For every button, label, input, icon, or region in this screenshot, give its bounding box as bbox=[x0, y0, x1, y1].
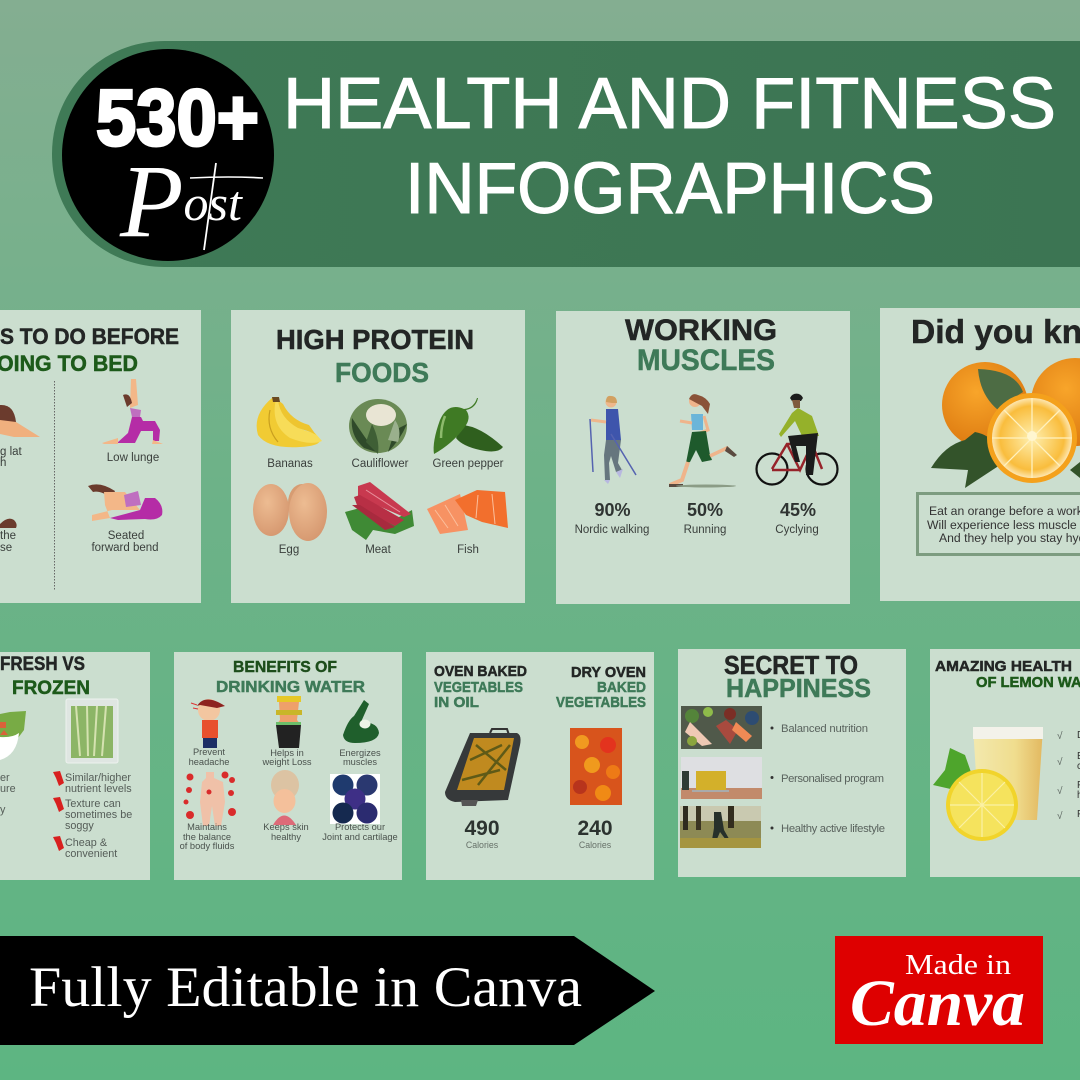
image: balanced food bbox=[681, 706, 762, 749]
heading: BENEFITS OF bbox=[233, 659, 337, 676]
heading bbox=[935, 658, 1080, 691]
text: percentages: 45% bbox=[780, 500, 816, 520]
text: frozen list: ure bbox=[0, 783, 16, 795]
text: checklist bbox=[1057, 730, 1080, 822]
text: left labels: se bbox=[0, 542, 12, 554]
icon: bananas bbox=[257, 397, 322, 447]
text: seated forward bend: forward bend bbox=[91, 542, 159, 554]
icon: stretch pose left bbox=[0, 405, 40, 528]
badge: 530+ Post bbox=[62, 49, 274, 261]
text: calories: 240 bbox=[577, 817, 613, 840]
text: frozen list: nutrient levels bbox=[65, 783, 132, 795]
text: happiness list: Healthy active lifestyle bbox=[781, 823, 885, 835]
icon: body fluids bbox=[184, 772, 236, 826]
icon: fish bbox=[427, 490, 508, 534]
heading bbox=[0, 324, 179, 376]
text: checklist: √ bbox=[1057, 810, 1063, 822]
text: checklist: √ bbox=[1057, 785, 1063, 797]
text: benefit labels: healthy bbox=[271, 832, 301, 842]
text: seated forward bend bbox=[91, 530, 159, 554]
icon: muscle arm bbox=[343, 700, 379, 743]
icon: baking tray bbox=[445, 729, 521, 806]
icon: runner bbox=[669, 394, 737, 488]
text: benefit labels: the balance bbox=[183, 832, 231, 842]
text: benefit labels: Keeps skin bbox=[263, 822, 309, 832]
panel: fresh vs frozen bbox=[0, 652, 150, 880]
text: frozen list: convenient bbox=[65, 848, 117, 860]
heading left: OVEN BAKED bbox=[434, 663, 527, 680]
heading right: DRY OVEN bbox=[571, 664, 646, 681]
text: benefit labels: of body fluids bbox=[180, 841, 235, 851]
panel: high protein foods bbox=[231, 310, 525, 603]
text: seated forward bend: Seated bbox=[108, 530, 144, 542]
text: frozen list: y bbox=[0, 804, 6, 816]
title: INFOGRAPHICS bbox=[405, 149, 935, 229]
icon: lemon water glass bbox=[933, 727, 1043, 841]
text: benefit labels: Energizes bbox=[339, 748, 381, 758]
heading right: VEGETABLES bbox=[556, 694, 646, 711]
text: food labels: Green pepper bbox=[433, 458, 504, 470]
badge: 530+ Post: ost bbox=[184, 175, 243, 231]
text: left labels: the bbox=[0, 530, 16, 542]
text: food labels: Fish bbox=[457, 544, 479, 556]
heading bbox=[276, 324, 474, 388]
heading: DRINKING WATER bbox=[216, 679, 365, 696]
icon: eggs bbox=[253, 483, 327, 541]
title bbox=[283, 64, 1056, 229]
image: active lifestyle bbox=[680, 806, 761, 848]
text: benefit labels: Maintains bbox=[187, 822, 227, 832]
arrow banner: fully editable: Fully Editable in Canva bbox=[29, 956, 582, 1019]
text: frozen list: Similar/higher bbox=[65, 772, 131, 784]
panel: lemon water bbox=[930, 649, 1080, 877]
icon: joints bbox=[330, 774, 380, 824]
badge: made in canva: Canva bbox=[850, 967, 1025, 1040]
text: activity labels: Nordic walking bbox=[575, 524, 649, 536]
text: percentages: 50% bbox=[687, 500, 723, 520]
panel: oven baked vegetables bbox=[426, 652, 654, 880]
heading: S TO DO BEFORE bbox=[0, 324, 179, 349]
text: percentages: 90% bbox=[594, 500, 631, 520]
arrow banner: fully editable bbox=[0, 936, 655, 1045]
text: low lunge: Low lunge bbox=[107, 452, 159, 464]
heading: FRESH VS bbox=[0, 653, 85, 675]
icon: nordic walker bbox=[590, 396, 636, 484]
text: benefit labels: weight Loss bbox=[261, 757, 312, 767]
heading bbox=[216, 659, 365, 696]
title: HEALTH AND FITNESS bbox=[283, 64, 1056, 144]
icon: seated forward bend bbox=[88, 484, 162, 521]
text: activity labels: Cyclying bbox=[775, 524, 819, 536]
panel: did you know bbox=[880, 308, 1080, 601]
text: percentages bbox=[594, 500, 816, 520]
text: benefit labels: headache bbox=[189, 757, 229, 767]
icon: red pins bbox=[53, 771, 64, 851]
panel: working muscles bbox=[556, 311, 850, 604]
text: left labels: g lat bbox=[0, 446, 23, 458]
header banner bbox=[52, 41, 1080, 267]
text: benefit labels: Joint and cartilage bbox=[322, 832, 398, 842]
panel: benefits of drinking water bbox=[174, 652, 402, 880]
heading right bbox=[556, 664, 646, 711]
icon: green pepper bbox=[434, 398, 503, 454]
heading: FOODS bbox=[335, 357, 429, 388]
text: checklist: √ bbox=[1057, 730, 1063, 742]
callout bbox=[918, 494, 1080, 554]
text: left labels bbox=[0, 446, 23, 554]
icon: boy with headache bbox=[191, 699, 225, 748]
text: frozen list: sometimes be bbox=[65, 809, 132, 821]
icon: towel face bbox=[271, 770, 299, 825]
text: food labels: Cauliflower bbox=[352, 458, 409, 470]
image: laptop bbox=[681, 757, 762, 799]
text: calories bbox=[464, 817, 613, 850]
text: benefit labels bbox=[180, 747, 398, 851]
text: food labels: Egg bbox=[279, 544, 299, 556]
panel: secret to happiness bbox=[678, 649, 906, 877]
text: frozen list: er bbox=[0, 772, 10, 784]
image: dry vegetables bbox=[570, 728, 622, 805]
heading bbox=[0, 653, 90, 699]
heading: HAPPINESS bbox=[726, 675, 871, 703]
text: benefit labels: Protects our bbox=[335, 822, 385, 832]
text: left labels: h bbox=[0, 457, 6, 469]
text: calories: Calories bbox=[579, 840, 612, 850]
panel: stretches before bed bbox=[0, 310, 201, 603]
badge: made in canva: Made in bbox=[905, 949, 1012, 981]
heading left bbox=[434, 663, 527, 711]
heading left: IN OIL bbox=[434, 694, 479, 711]
text: benefit labels: muscles bbox=[343, 757, 377, 767]
badge: 530+ Post: P bbox=[119, 144, 184, 259]
heading: MUSCLES bbox=[637, 344, 775, 377]
badge: made in canva bbox=[835, 936, 1043, 1044]
text: benefit labels: Helps in bbox=[270, 748, 304, 758]
icon: cyclist bbox=[756, 394, 838, 484]
text: checklist: √ bbox=[1057, 756, 1063, 768]
text: activity labels: Running bbox=[684, 524, 726, 536]
heading: HIGH PROTEIN bbox=[276, 324, 474, 355]
text: food labels bbox=[267, 458, 504, 556]
heading: WORKING bbox=[625, 314, 777, 347]
heading left: VEGETABLES bbox=[434, 679, 523, 696]
text: frozen list: Texture can bbox=[65, 798, 121, 810]
text: happiness list: Personalised program bbox=[781, 773, 884, 785]
text: activity labels bbox=[575, 524, 819, 536]
icon: salad bowl bbox=[0, 711, 26, 760]
icon: waist measure bbox=[276, 696, 302, 748]
text: frozen list: Cheap & bbox=[65, 837, 108, 849]
text: food labels: Meat bbox=[365, 544, 392, 556]
heading bbox=[724, 652, 871, 703]
icon: low lunge bbox=[102, 379, 163, 444]
icon: cauliflower bbox=[349, 399, 407, 454]
text: frozen list: soggy bbox=[65, 820, 94, 832]
text: happiness list bbox=[770, 723, 885, 835]
text: calories: 490 bbox=[464, 817, 500, 840]
icon: meat bbox=[345, 482, 414, 540]
text: food labels: Bananas bbox=[267, 458, 313, 470]
heading bbox=[625, 314, 777, 377]
text: frozen list bbox=[0, 772, 132, 860]
text: benefit labels: Prevent bbox=[193, 747, 225, 757]
heading: SECRET TO bbox=[724, 652, 858, 680]
heading: OING TO BED bbox=[0, 351, 138, 376]
heading: AMAZING HEALTH bbox=[935, 658, 1072, 675]
icon: oranges bbox=[931, 358, 1080, 488]
icon: frozen bag bbox=[66, 699, 118, 763]
badge: 530+ Post: 530+ bbox=[96, 73, 259, 162]
text: calories: Calories bbox=[466, 840, 499, 850]
text: happiness list: Balanced nutrition bbox=[781, 723, 868, 735]
heading right: BAKED bbox=[597, 679, 646, 696]
heading: FROZEN bbox=[12, 677, 90, 699]
